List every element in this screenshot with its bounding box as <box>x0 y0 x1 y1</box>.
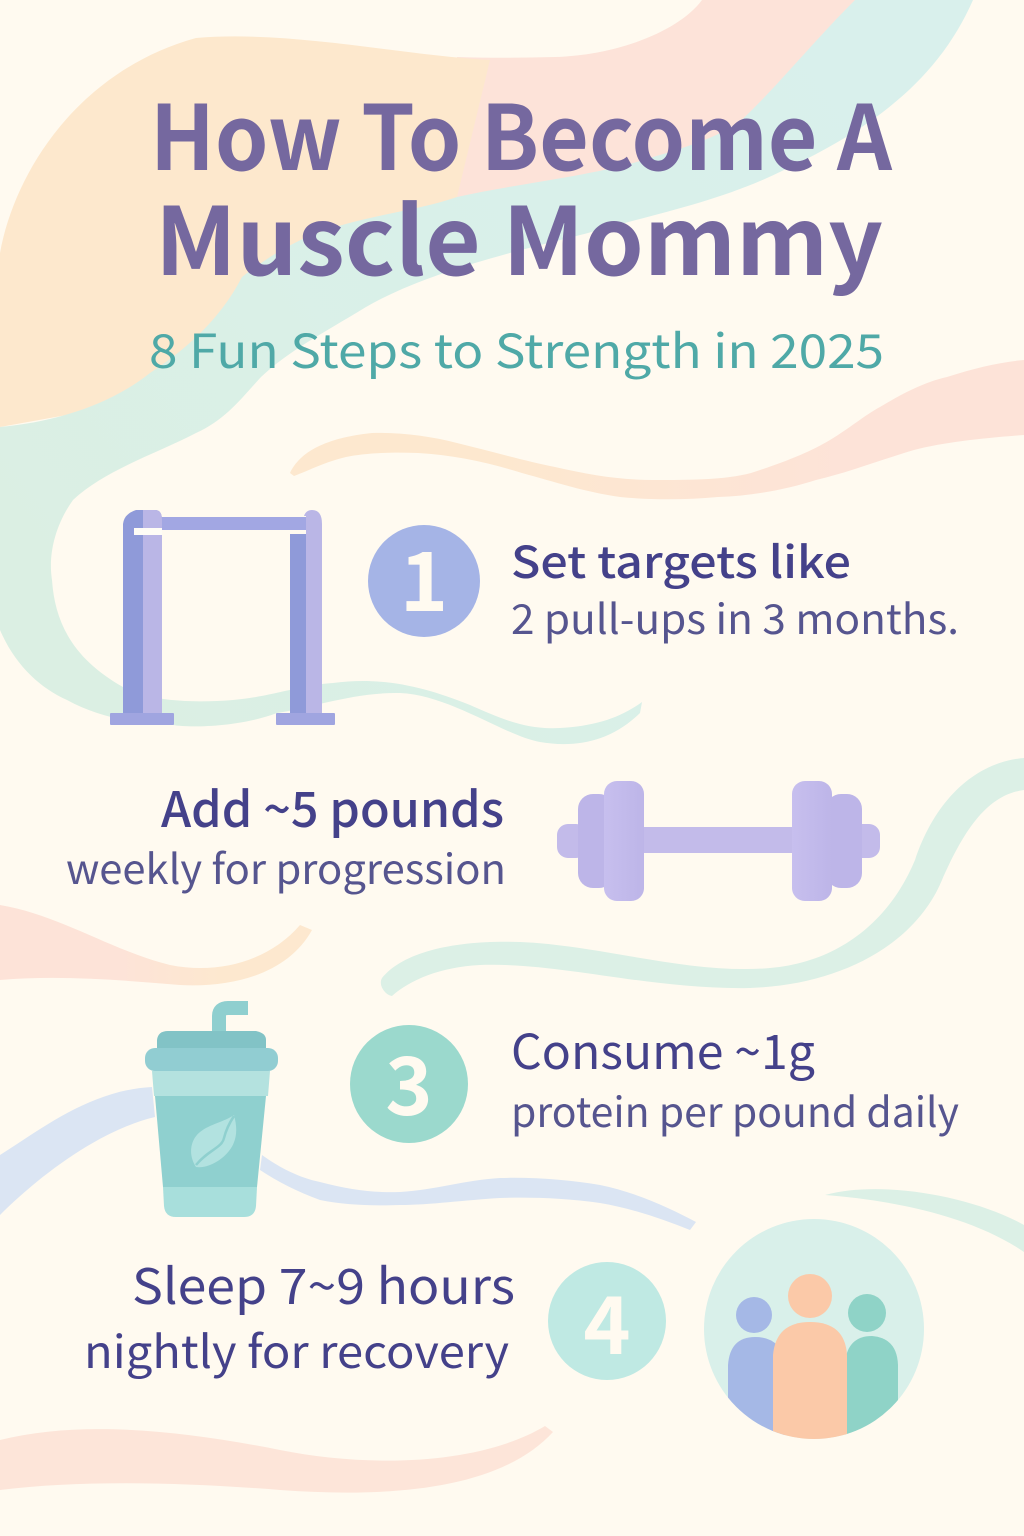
step 4 text: Sleep 7~9 hours <box>132 1248 515 1319</box>
icon: pull-up bar <box>110 510 335 725</box>
step 4 badge: 4 <box>583 1262 631 1378</box>
step 2 text <box>66 771 506 896</box>
background wave: top colours <box>0 0 973 744</box>
step 4 badge <box>548 1262 666 1380</box>
step 3 text <box>511 1013 959 1139</box>
step 2 text: Add ~5 pounds <box>161 771 504 842</box>
background wave: lower ribbons <box>0 758 1024 1493</box>
icon: group of people <box>704 1219 924 1440</box>
step 3 text: Consume ~1g <box>511 1013 815 1083</box>
icon: dumbbell <box>557 781 880 901</box>
step 1 text: 2 pull-ups in 3 months. <box>511 586 959 646</box>
step 2 text: weekly for progression <box>66 836 506 896</box>
step 3 badge <box>350 1023 468 1143</box>
step 1 text: Set targets like <box>511 527 851 591</box>
step 1 badge <box>368 516 480 637</box>
title: How To Become A <box>150 66 893 196</box>
step 3 badge: 3 <box>385 1023 433 1139</box>
title <box>150 66 893 303</box>
step 4 text: nightly for recovery <box>84 1316 509 1381</box>
step 4 text <box>84 1248 515 1381</box>
subtitle: 8 Fun Steps to Strength in 2025 <box>149 313 884 382</box>
icon: protein shaker <box>145 1008 278 1217</box>
step 1 badge: 1 <box>400 516 448 635</box>
step 1 text <box>511 527 959 646</box>
step 3 text: protein per pound daily <box>511 1079 959 1139</box>
title: Muscle Mommy <box>155 167 883 303</box>
background wave: peach and pink ribbon <box>290 360 1024 499</box>
